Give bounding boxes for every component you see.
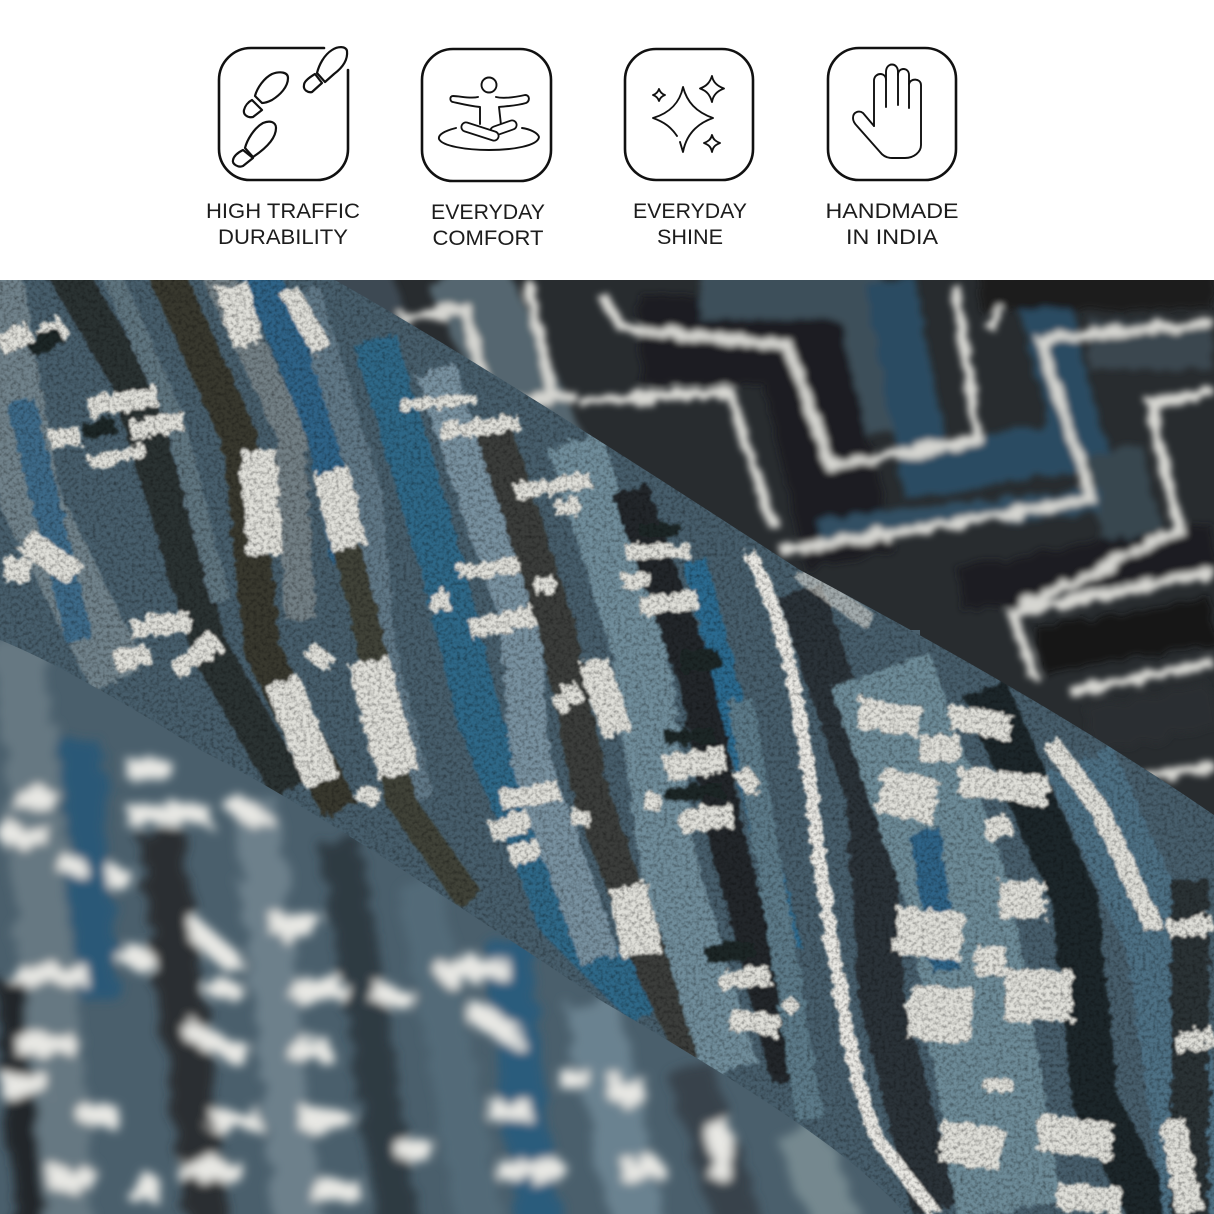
photo: rug roll in focus [0,280,1214,1214]
icon: seated figure, everyday comfort [422,49,551,181]
label: handmade in India: IN INDIA [846,226,938,249]
label: handmade in India [826,200,958,249]
icon row [206,46,958,250]
dark yarn accents [30,335,755,955]
label: everyday shine: SHINE [657,226,723,249]
label: everyday comfort: COMFORT [432,227,544,250]
label: high traffic durability [206,200,360,249]
label: everyday comfort [431,201,545,250]
label: everyday shine: EVERYDAY [633,200,747,223]
label: everyday shine [633,200,747,249]
icon: sparkles, everyday shine [625,49,753,180]
white yarn blocks [0,285,1214,1214]
white header band [0,0,1214,280]
icon: raised hand, handmade in India [828,48,956,180]
label: high traffic durability: HIGH TRAFFIC [206,200,360,223]
photo: rolled rug close-up [0,280,1214,1214]
label: handmade in India: HANDMADE [826,200,958,223]
photo background: upper right blurred chevrons [300,270,1214,840]
label: high traffic durability: DURABILITY [218,226,348,249]
label: everyday comfort: EVERYDAY [431,201,545,224]
photo background: lower left blurred pattern [0,630,920,1214]
icon: footprints, high traffic durability [219,47,348,180]
